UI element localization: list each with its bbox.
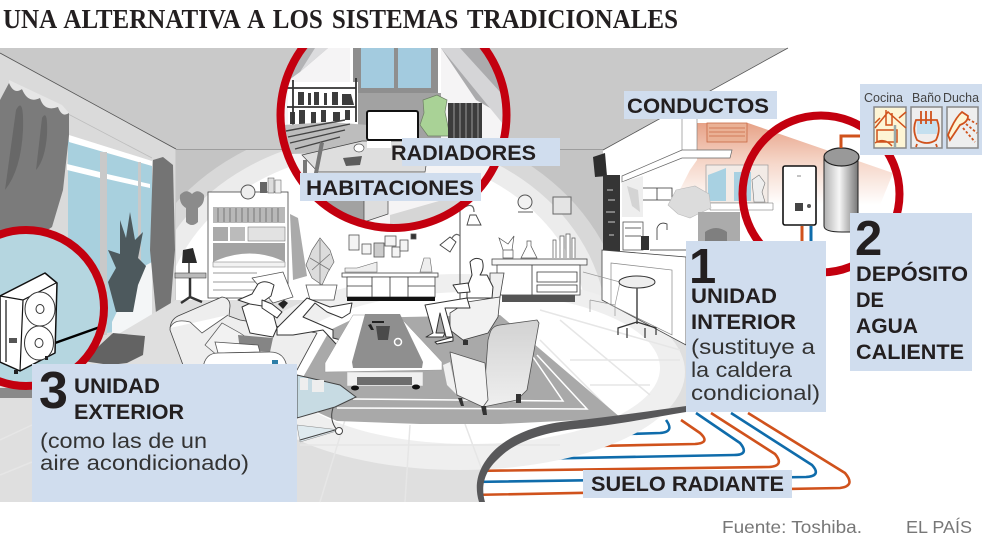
floor below desk: [326, 201, 364, 220]
ceiling: [0, 48, 788, 150]
callout 2: depósito de agua caliente: CALIENTE: [856, 341, 964, 364]
radiator: [448, 103, 482, 138]
kitchen window: [706, 165, 773, 210]
label ducha: Ducha: [943, 91, 979, 105]
interior unit: [783, 166, 816, 243]
peach heat glow: [672, 123, 893, 205]
label cocina: Cocina: [864, 91, 903, 105]
publisher credit: EL PAÍS: [906, 517, 972, 537]
floor: [0, 274, 686, 502]
radiant floor pipes: [470, 413, 849, 495]
callout 3: unidad exterior: 3: [39, 362, 68, 420]
kitchen wall: [603, 48, 788, 250]
outdoor unit: [0, 273, 57, 374]
wall clock and frame: [518, 195, 571, 214]
callout 1: unidad interior: UNIDAD: [691, 285, 777, 308]
dark ottoman: [83, 333, 145, 365]
sideboard left: [342, 258, 438, 301]
desk: [302, 141, 430, 222]
label baño: Baño: [912, 91, 941, 105]
callout 1: unidad interior: 1: [689, 240, 716, 294]
front armchair: [443, 320, 539, 415]
callout 1: unidad interior: la caldera: [691, 358, 792, 382]
ventilation grille: [707, 123, 747, 142]
kitchen grey panel and pot: [698, 212, 740, 244]
red ring right: [742, 116, 900, 272]
icon: shower: [947, 107, 978, 148]
back wall with glow: [176, 150, 603, 300]
rug: [290, 315, 621, 424]
label: radiadores: [391, 138, 560, 166]
left curtain: [0, 80, 69, 262]
callout 2: depósito de agua caliente: 2: [855, 212, 882, 266]
kitchen wall panel and shelf: [622, 176, 672, 217]
kitchen counter: [583, 250, 686, 345]
callout 2: depósito de agua caliente: AGUA: [856, 315, 918, 338]
picture frames: [349, 234, 416, 257]
duct: [682, 118, 697, 151]
left wall with window and curtains: [0, 53, 603, 400]
bookshelf: [208, 178, 288, 298]
callout 2: depósito de agua caliente: DEPÓSITO: [856, 262, 968, 286]
domestic hot water panel: [860, 84, 982, 155]
water tank: [824, 148, 859, 232]
callout 2: depósito de agua caliente: DE: [856, 289, 884, 312]
sofa: [170, 272, 317, 370]
label: suelo radiante: SUELO RADIANTE: [591, 473, 784, 496]
floor lamps: [440, 205, 481, 300]
label: radiadores: RADIADORES: [391, 142, 536, 165]
bottles and vases: [499, 234, 575, 258]
source credit: Fuente: Toshiba.: [722, 517, 862, 537]
callout 1: unidad interior: (sustituye a: [691, 335, 815, 359]
callout 2: depósito de agua caliente: [850, 212, 972, 371]
callout 3: unidad exterior: UNIDAD: [74, 375, 160, 398]
bar stool: [618, 276, 656, 338]
woman on the sofa: [238, 282, 355, 347]
plant in pot: [306, 238, 337, 300]
kitchen appliance and faucet: [623, 222, 686, 250]
coffee table: [325, 314, 442, 390]
icon: kitchen sink: [874, 107, 906, 148]
glass side table: [297, 375, 356, 442]
callout 3: unidad exterior: aire acondicionado): [40, 451, 249, 475]
plant outside window: [108, 212, 146, 312]
pipe tank to outlets: [841, 136, 876, 148]
callout 3: unidad exterior: (como las de un: [40, 429, 207, 453]
callout 1: unidad interior: [686, 240, 826, 412]
plant: [420, 95, 450, 136]
blackboard: [603, 175, 620, 251]
monitor: [367, 111, 418, 148]
right curtain: [150, 157, 175, 313]
bookshelf: [287, 78, 358, 124]
label: conductos: CONDUCTOS: [627, 95, 769, 118]
extractor hood: [622, 150, 732, 182]
callout 1: unidad interior: INTERIOR: [691, 311, 796, 334]
animal head trophy: [180, 191, 204, 225]
hanging coat: [290, 214, 307, 280]
books and globe on top: [241, 178, 281, 199]
top circle: rooms and radiators: [276, 48, 510, 232]
label: habitaciones: HABITACIONES: [306, 177, 474, 200]
floor edge band: [477, 406, 686, 502]
hanging plant: [668, 186, 711, 218]
sideboard right: [492, 234, 587, 302]
window: [67, 135, 152, 340]
man in armchair: [425, 258, 504, 345]
lamp and side table: [175, 248, 206, 303]
callout 3: unidad exterior: EXTERIOR: [74, 401, 184, 424]
red ring left: [0, 230, 104, 386]
window: [350, 48, 441, 93]
title: UNA ALTERNATIVA A LOS SISTEMAS TRADICIONALES: [3, 4, 678, 34]
icon: bath: [911, 107, 942, 148]
left circle: exterior unit: [0, 230, 104, 386]
speaker: [593, 153, 607, 177]
red ring top: [276, 48, 510, 232]
callout 1: unidad interior: condicional): [691, 381, 820, 405]
bed with clutter: [283, 122, 368, 154]
callout 3: unidad exterior: [32, 362, 297, 502]
